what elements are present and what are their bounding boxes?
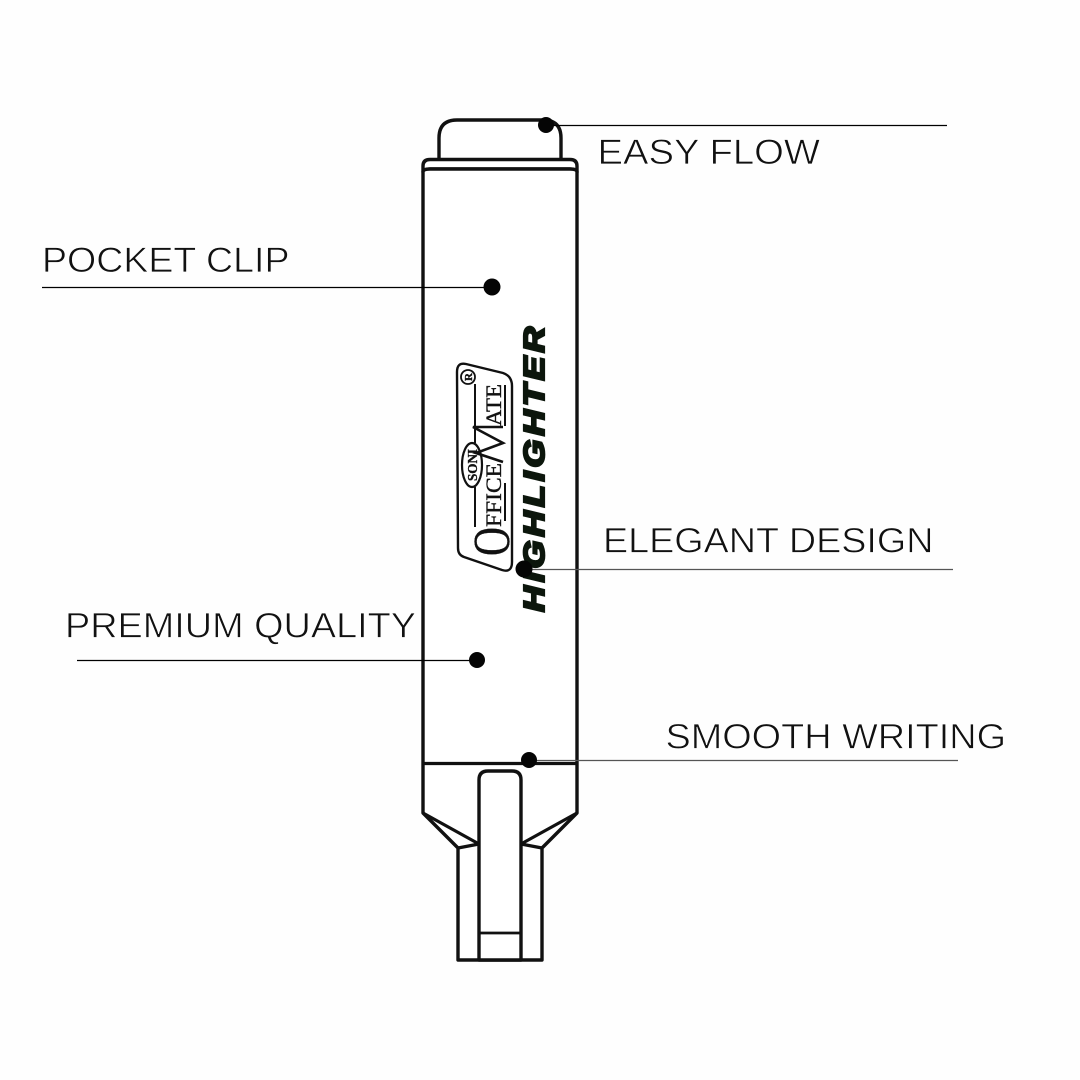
callout: easy flow bbox=[538, 117, 947, 172]
callout: premium quality: PREMIUM QUALITY bbox=[65, 606, 416, 646]
callout: premium quality bbox=[65, 606, 485, 668]
registered mark: R bbox=[463, 372, 475, 381]
callout: smooth writing: SMOOTH WRITING bbox=[666, 718, 1006, 756]
barrel seam bbox=[423, 762, 577, 765]
OFFICE wordmark bbox=[464, 463, 521, 556]
callout: pocket clip bbox=[42, 241, 500, 296]
cap bbox=[439, 120, 561, 160]
logo rules bbox=[475, 384, 505, 527]
collar bbox=[423, 160, 577, 172]
OFFICE wordmark: FFICE bbox=[481, 463, 506, 527]
barrel bbox=[423, 169, 577, 960]
registered mark bbox=[461, 370, 475, 384]
callout: elegant design bbox=[516, 522, 953, 578]
SONI oval: SONI bbox=[466, 449, 481, 481]
callout: elegant design: ELEGANT DESIGN bbox=[603, 522, 934, 560]
OFFICE wordmark: O bbox=[464, 527, 521, 556]
callout: pocket clip: POCKET CLIP bbox=[42, 241, 290, 280]
highlighter outline bbox=[423, 120, 577, 960]
nib bbox=[479, 771, 521, 960]
MATE wordmark bbox=[473, 384, 506, 462]
brand logo bbox=[457, 364, 521, 571]
callout: smooth writing bbox=[521, 718, 1006, 768]
tip taper facets bbox=[423, 813, 577, 848]
nib line bbox=[480, 932, 520, 934]
MATE wordmark: ATE bbox=[481, 384, 506, 426]
logo badge bbox=[457, 364, 512, 571]
SONI oval bbox=[462, 443, 482, 487]
callout: easy flow: EASY FLOW bbox=[598, 133, 820, 172]
product name: HIGHLIGHTER bbox=[519, 323, 551, 612]
